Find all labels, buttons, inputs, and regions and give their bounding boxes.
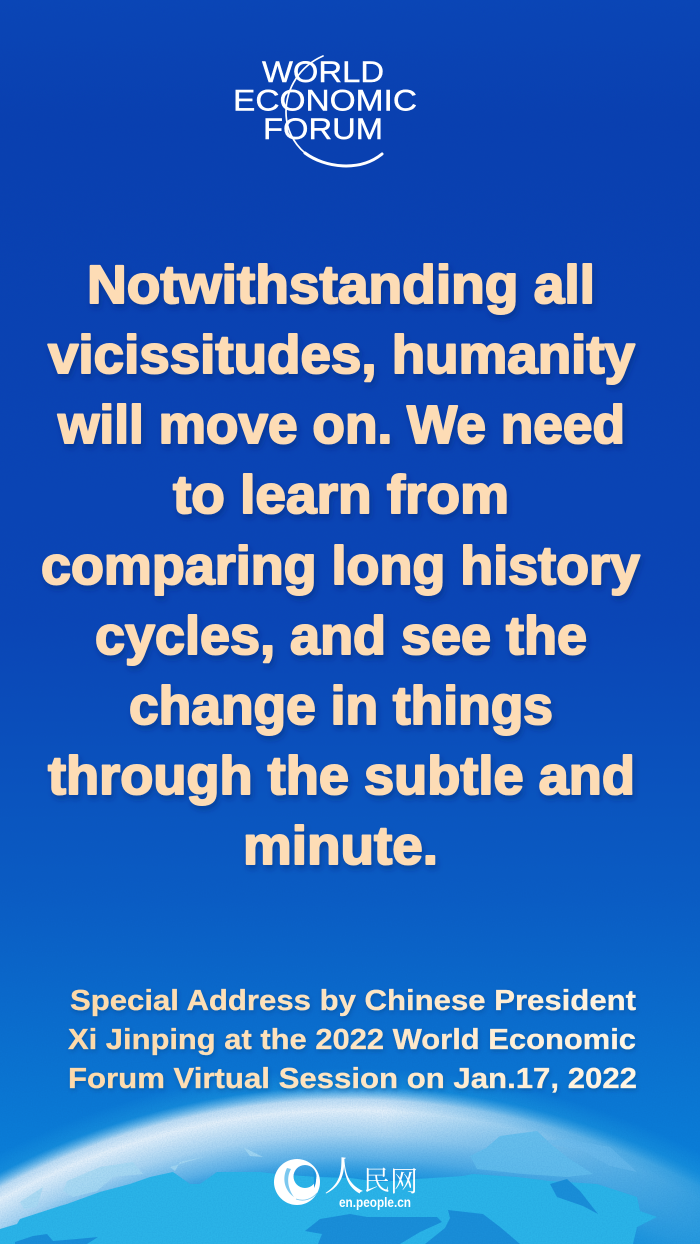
website address: en.people.cn [339,1194,411,1210]
swirl emblem [274,1159,320,1205]
hudson bay lake [550,1179,598,1214]
People's Daily Online logo [274,1154,418,1210]
bottom left sea [15,1234,98,1244]
bottom centre sea [305,1214,442,1244]
World Economic Forum logo [233,56,417,166]
Chinese wordmark: 民 [363,1166,390,1196]
quote text: will move on. We need [57,395,625,455]
quote text: through the subtle and [48,746,635,806]
logo text [233,56,417,146]
quote text: cycles, and see the [95,606,587,666]
source attribution: Special Address by Chinese President [70,985,637,1017]
left arctic islands [20,1147,263,1209]
quote text [41,255,640,876]
land mass [0,1172,657,1244]
right arctic islands [470,1131,593,1177]
source attribution: Xi Jinping at the 2022 World Economic [68,1024,636,1056]
greenland [537,1139,637,1172]
logo text: FORUM [263,113,383,146]
quote text: comparing long history [41,536,640,596]
quote text: Notwithstanding all [87,255,595,315]
bottom right sea [425,1210,520,1244]
source attribution: Forum Virtual Session on Jan.17, 2022 [68,1063,637,1095]
Chinese wordmark: 网 [390,1167,418,1198]
quote text: change in things [129,676,553,736]
source attribution [68,985,637,1095]
glow band [0,1087,700,1244]
quote text: to learn from [173,465,509,525]
quote text: vicissitudes, humanity [48,325,635,385]
globe [0,1060,700,1244]
logo text: ECONOMIC [233,84,417,118]
logo text: WORLD [262,56,384,89]
Chinese wordmark: 人 [324,1154,364,1199]
Chinese wordmark [324,1154,418,1199]
quote text: minute. [243,816,438,876]
logo arc [286,56,382,166]
